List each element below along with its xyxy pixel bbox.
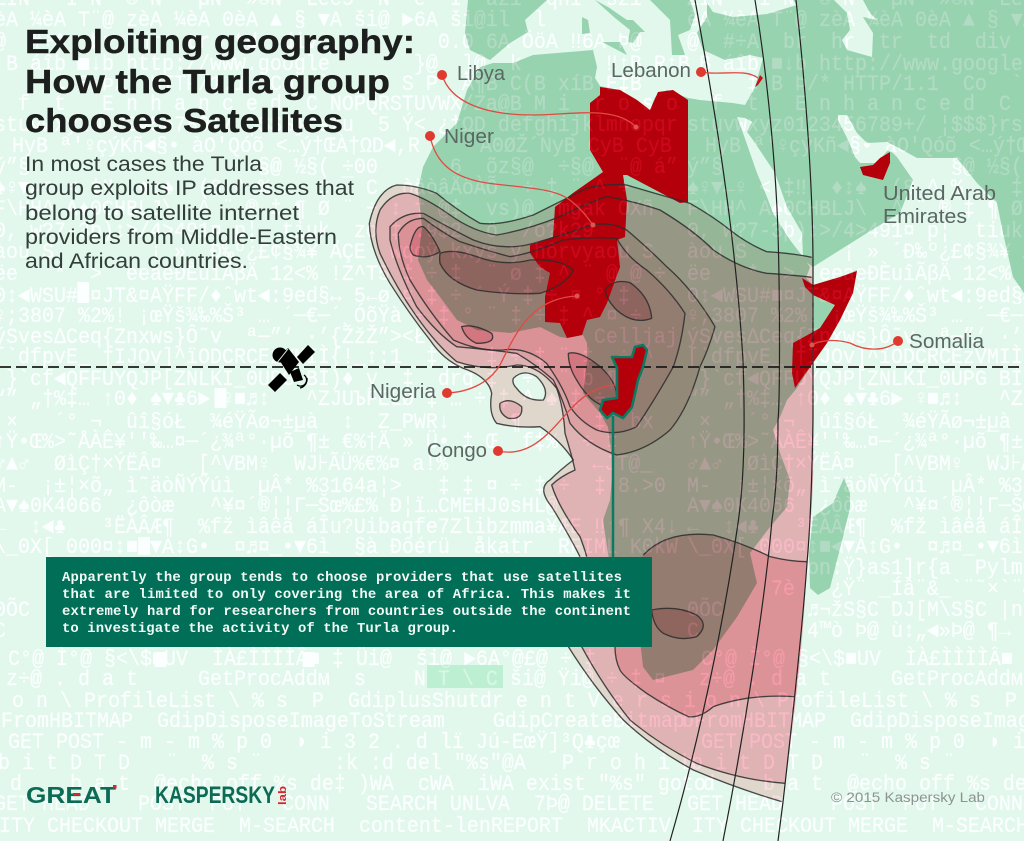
footprint: pink band: [376, 193, 814, 783]
background pattern: scrolling code text: f t E n h a n c e d C NOPQRSTUVWX/Za@B M i r o s o: [18, 93, 678, 117]
callout box: that are limited to only covering the area of Africa. This makes it: [62, 587, 631, 603]
background pattern: scrolling code text: o n \ ProfileList \ % s P GdiplusShutdr e n t V e r s i: [12, 690, 696, 714]
background pattern: scrolling code text: GET HEAD POST PUT CONN SEARCH UNLVA 7Þ@ DELETE: [0, 793, 654, 817]
label and leader: Somalia: Somalia: [909, 331, 985, 353]
background pattern: scrolling code text: àou S ¡ » ´Ð‰º¿£¢§¾¥ ÄÇE wqoÿ kxys y hôrvyaou S: [0, 241, 654, 265]
satellite footprint: coverage fills: [369, 185, 814, 802]
highlighted country: Somalia: [792, 271, 857, 388]
title: Exploiting geography:: [25, 23, 415, 60]
background pattern: scrolling code text: 0, w?7-3þ)↕>/4>491¤ p¦ tiuk zo ‡ .9$2 ö /o?k29: [0, 220, 594, 244]
highlighted country: Lebanon: [755, 75, 763, 87]
label and leader: Libya: Libya: [457, 63, 506, 85]
footprint: pink island: [500, 401, 522, 419]
label: United Arab Emirates: [883, 183, 996, 228]
background pattern: scrolling code text: C°@ Ì°@ §<\$■UV ÌÀ£ÌÌÌÌÂ■ ‡ Üi@ ši@ ►6A°@£@ ÷ ‡: [8, 648, 596, 672]
background pattern: scrolling code text: }`cf◄QFFUYQJP[ZNLKI_0UPG BÌ)♦ y ‡ drq ‡ ÷ ¨ b ¶ ÷: [6, 368, 642, 392]
background pattern: scrolling code text: ← ↕◄♣ ³ËÀÂÆ¶ %fž ìâêã áÎu?Uibaqfe7Zlibzmma¥ÆE ‼↑¶ X4↓: [0, 516, 678, 540]
background pattern: scrolling code text: on:Ÿ}as1]r{a Pylm ‡ ÷ ¨ ^ ÷ ‡ § Ju¢zv: [114, 557, 630, 581]
map: land masses: [418, 0, 1024, 680]
intro text: belong to satellite internet: [25, 202, 299, 225]
label: United Arab Emirates: United Arab: [883, 183, 996, 205]
background pattern: scrolling code text: B áîb ■↓b http://www.google }@ ]@ k ‼↑B R↑B: [6, 53, 690, 77]
intro text: In most cases the Turla: [25, 153, 262, 176]
callout box: extremely hard for researchers from countries outside the continent: [62, 604, 631, 620]
highlight block: [427, 665, 503, 688]
label and leader: Niger: [425, 126, 596, 228]
label and leader: Somalia: [810, 331, 985, 353]
label and leader: Libya: [437, 63, 638, 130]
callout box: Apparently the group tends to choose providers that use satellites: [62, 570, 622, 586]
footprint: outer band: [369, 185, 814, 802]
background pattern: scrolling code text: ýSvesΔCeq{Znxws}Ô˜v ª─”‘ ·’{ŽžŽ”><Ł Celljaj: [0, 326, 678, 350]
label and leader: Lebanon: Lebanon: [611, 60, 691, 82]
copyright: © 2015 Kaspersky Lab: [831, 790, 985, 805]
background pattern: scrolling code text: 0ÕC ♬¬žS§C DJ[M\S§C |n] ‡ ÷ ÷ ^ ‡ ‡ ¾ ÷ ¤ ‡ ÷ ^: [0, 599, 654, 623]
callout box: to investigate the activity of the Turla group.: [62, 621, 458, 637]
highlighted country: Libya, Niger and Nigeria: [530, 87, 688, 338]
background pattern: scrolling code text: ↑Ÿ•Œ%>˜ÅÀÊ¥''‰…¤─´¿¾ª°·µõ¯¶± €%†Ä » Ü• ‡ Œ f‡% ÷ ‡: [0, 431, 618, 455]
background pattern: scrolling code text: M- ¡±¦×õ„ ì˜äòÑÝŸúì µÂ* %3164a¦> ‡ ‡ ¤ ÷ ‡ ÷ ‡ 8.>0: [0, 475, 666, 499]
background pattern: scrolling code text: @ #÷A br hr tr td div 0.0 6A ÖöA ‼6A Þ@: [0, 31, 642, 55]
label and leader: Lebanon: [611, 60, 758, 82]
background pattern: scrolling code text: A▼♠0K4066 ¿ôòæ ^¥¤´®¦¦Γ─Šœ%£% Ð¦ï…CMEHJ0sHL@: [0, 495, 558, 519]
background pattern: scrolling code text: C 4™ò Þ@ ù↕„◄»Þ@ ¶→ ‡ ÷ ^ ÷ ° ‡ ¨ ‡ ÷ ‡ ÷ ‡: [0, 620, 618, 644]
background pattern: scrolling code text: èA ¼èA T¨@ zèA ¼èA 0èA ▲ § ▼A ši@ ►6A ši@il l: [0, 9, 546, 33]
background pattern: scrolling code text: ITY CHECKOUT MERGE M-SEARCH content-lenREPORT MKACTIV: [0, 815, 671, 839]
background pattern: scrolling code text: F\HH^ A♠0CHBLJ\ ^ ¨ ® ‡ ¶ Ø ¨ ÷ ↕ ‡ @‡ vs)@ mgak OXñ: [0, 198, 654, 222]
background pattern: scrolling code text: d b a t @echo off %s de‡ )WA cWA iWA exist "%s" goto: [10, 773, 706, 797]
title: How the Turla group: [25, 63, 390, 100]
background pattern: scrolling code text: [`dfpvE_ †IJOv]^ïODCRCEzVMIÌ{!_↕:1 ‡ _ ‡ ÷ ‡ ¨ ‡ ÷ ^: [0, 346, 654, 370]
label and leader: Niger: Niger: [444, 126, 494, 148]
satellite orbit lines: [670, 0, 813, 841]
connector line from Congo to callout: [612, 416, 614, 560]
background pattern: scrolling code text: b i t D T D ¨ % s ¨ :k :d del "%s"@A P r o h i b: [0, 752, 694, 776]
highlighted country: Congo: [600, 345, 647, 418]
logo: Kaspersky Lab: lab: [277, 786, 289, 805]
background pattern: scrolling code text: ‡ B Þ/* HTTP/1.1 Co ` ; I S P À¶B C(B xíB E‡B: [54, 73, 642, 97]
label: United Arab Emirates: Emirates: [883, 206, 967, 228]
background pattern: scrolling code text: × ´° ¬ ûî§óŁ ¾éŸÃø¬±µà ↕ Z_PWR↓ ¶ ‡ bx: [6, 411, 654, 435]
background pattern: scrolling code text: \_0X[ 000¤↕■◄▼A↕G• ¤♬¤_•▼6ì §à Ðôérü åkatr RFIML K0kW: [0, 536, 678, 560]
background pattern: scrolling code text: bFromHBITMAP GdipDisposeImageToStream GdipCreateBitmap: [0, 710, 685, 734]
callout box: [46, 557, 652, 647]
background pattern: scrolling code text: ëe * > eeaeÐÈuîÃβÄ 12<% !Z^T5 ‡ ÷ ‡ ¨ ø ‡ ^ ¨ @ @ ÷: [0, 263, 666, 287]
background pattern: scrolling code text: 0↕◄WSU#■¤JT&¤AŸFF/♦ˆwt◄:9ed§↔ 5←ø ¤ ‡ ÷ ´ Ý ‡ ÷ ¤ ° ‡: [0, 285, 630, 309]
label and leader: Nigeria: [370, 294, 580, 403]
background pattern: scrolling code text: ♠♀▼←♀ < ‡‼ ♦↕♠ (8 ^ % … ‡ ¯ C òäòâÄöÀÕ ÷ ‡ ¨ ^ ÷: [0, 177, 630, 201]
footprint: third contour region: [390, 213, 715, 455]
background pattern: scrolling code text: ♂▲♂ ØìÇ†×ÝËÂ¤ [^VBM♀ WJ⊦ÃÜ%€%¤ a!% ←JT@_: [0, 453, 652, 477]
background pattern: scrolling code text: z÷@ . d a t GetProcAddм s N T \ C ši@ Ÿi@ ÷ ‡ ¤: [6, 668, 666, 692]
intro text: [25, 153, 354, 273]
background pattern: scrolling code text: “” „†%‡… ↑0♦ ♠▼♣6► ♀■♬↕ ^ZJUЪFELØ ‡ … ÷ ‡ ^ ♠ ‡ ÷ ¨: [0, 388, 630, 412]
icon: satellite: [268, 345, 315, 392]
background pattern: scrolling code text: ♀;3807 %2%! ¡œŸš¾‰%Š³ … ´─€─´¸ÓõŸà ÷ ‡ ° ¨ ‡ ÷ ‡ ^ ¤ ÷: [0, 305, 642, 329]
label and leader: Nigeria: Nigeria: [370, 381, 437, 403]
logo: Kaspersky Lab: KASPERSKY: [155, 782, 275, 809]
background pattern: scrolling code text: HyB ª'♀çýKñ◄§• àO'Qóõ <…ý†ŒÀ†ΩD◄,R À0ØŽ´NyB CyB CyB: [12, 135, 672, 159]
footprint: southern deep region: [613, 534, 807, 717]
equator dashed line: [0, 366, 1024, 368]
title: chooses Satellites: [25, 102, 343, 139]
intro text: group exploits IP addresses that: [25, 177, 354, 200]
title: [25, 23, 415, 139]
label and leader: Congo: Congo: [427, 440, 487, 462]
footprint: deep ovals: [410, 227, 703, 639]
footprint: fourth contour region: [398, 218, 685, 433]
background pattern: scrolling code text: stuvwxyz0123456789+/ ¦$$$}rstu 5 Ý< ¿†ΩD defghijklmnopqr: [0, 114, 678, 138]
logo: GReAT: GREAT: [26, 782, 116, 808]
label and leader: Congo: [427, 382, 630, 462]
intro text: and African countries.: [25, 250, 248, 273]
background pattern: scrolling code text: GET POST - m - m % p 0 ◗ i 3 2 . d lï Jú-EœŸ]³Q♣çœ: [8, 731, 620, 755]
highlighted country: United Arab Emirates: [860, 152, 890, 180]
satellite footprint: contour lines: [369, 185, 812, 802]
background pattern: scrolling code text: ý”§ §@ ½§( ÷00 6 õz§@ ÷§@ ¨@ á”: [0, 156, 678, 180]
background pattern: scrolling code text: 7è ¿Ÿ¨ _Íâ¨&_`¨˜×`¨& ‡ ÷ ^ ÷ ¨ ‡ ¢ ® ¦ ÷ ^ ‡: [78, 578, 642, 602]
intro text: providers from Middle-Eastern: [25, 226, 337, 249]
